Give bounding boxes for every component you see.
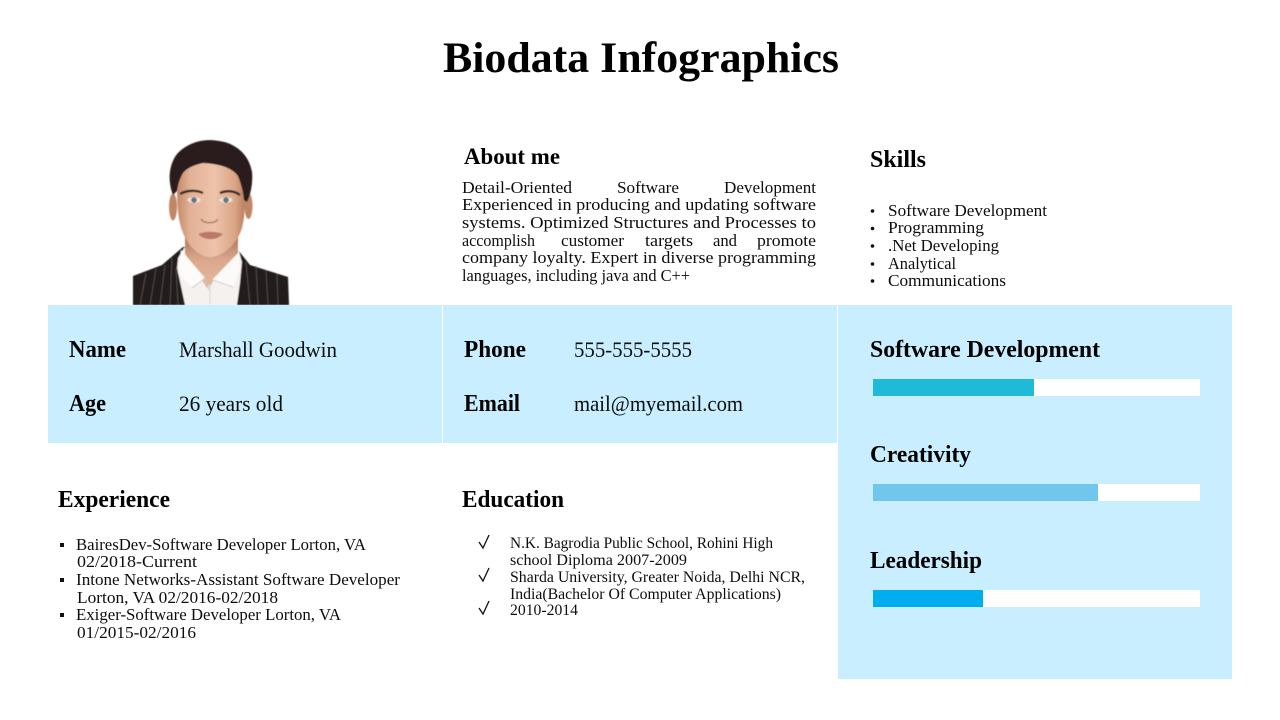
about me paragraph: company loyalty. Expert in diverse programming (462, 248, 816, 267)
about me paragraph: accomplish (462, 231, 536, 250)
about me paragraph (462, 178, 816, 285)
education list: 2010-2014 (510, 602, 578, 619)
heading: education: Education (462, 486, 564, 513)
education list: Sharda University, Greater Noida, Delhi NCR, (510, 569, 805, 586)
about me paragraph: languages, including java and C++ (462, 266, 690, 285)
eyebrows (180, 191, 240, 195)
education list: school Diploma 2007-2009 (510, 552, 687, 569)
education list: India(Bachelor Of Computer Applications) (510, 586, 781, 603)
education list (479, 535, 805, 619)
bar: creativity (870, 441, 1200, 501)
panel: phone and email: mail@myemail.com (574, 391, 743, 416)
about me paragraph: Software (617, 178, 679, 197)
skills list: Communications (888, 271, 1006, 290)
panel: phone and email (443, 305, 837, 443)
bar: leadership (870, 547, 1200, 607)
shirt (177, 248, 242, 305)
experience list: 02/2018-Current (77, 552, 197, 571)
panel: name and age (48, 305, 442, 443)
heading: experience: Experience (58, 486, 170, 513)
skills list: Software Development (888, 201, 1047, 220)
mouth (198, 232, 223, 239)
heading: about me: About me (464, 144, 560, 169)
about me paragraph: Detail-Oriented (462, 178, 573, 197)
experience list: 01/2015-02/2016 (77, 623, 196, 642)
skills list: Analytical (888, 254, 956, 273)
panel: name and age: Age (69, 390, 106, 417)
about me paragraph: Development (724, 178, 816, 197)
collar (178, 250, 205, 288)
panel: name and age: Name (69, 336, 126, 363)
panel: phone and email: Phone (464, 336, 526, 363)
nose (201, 219, 218, 223)
bar: software development: Software Development (870, 336, 1101, 363)
panel: phone and email: Email (464, 390, 520, 417)
portrait photo (133, 140, 289, 305)
about me paragraph: and (713, 231, 738, 250)
skills list: .Net Developing (888, 236, 999, 255)
neck (185, 236, 238, 288)
experience list: Intone Networks-Assistant Software Developer (76, 570, 400, 589)
eyes (188, 197, 200, 203)
about me paragraph: targets (645, 231, 693, 250)
experience list (60, 535, 400, 642)
about me paragraph: promote (757, 231, 816, 250)
experience list: BairesDev-Software Developer Lorton, VA (76, 535, 367, 554)
skills list: Programming (888, 218, 985, 237)
about me paragraph: customer (561, 231, 625, 250)
panel: name and age: Marshall Goodwin (179, 337, 337, 362)
about me paragraph: systems. Optimized Structures and Processes to (462, 213, 816, 232)
bar: creativity: Creativity (870, 441, 972, 468)
experience list: Exiger-Software Developer Lorton, VA (76, 605, 342, 624)
bar: leadership: Leadership (870, 547, 982, 574)
education list: N.K. Bagrodia Public School, Rohini High (510, 535, 773, 552)
panel: skill bars (838, 305, 1232, 679)
hair (170, 140, 252, 202)
heading: skills: Skills (870, 146, 926, 173)
jacket (133, 247, 289, 305)
face (177, 160, 245, 257)
experience list: Lorton, VA 02/2016-02/2018 (77, 588, 278, 607)
skills list (871, 201, 1047, 290)
panel: phone and email: 555-555-5555 (574, 337, 692, 362)
title: Biodata Infographics (443, 35, 839, 82)
bar: software development (870, 336, 1200, 396)
panel: name and age: 26 years old (179, 391, 283, 416)
about me paragraph: Experienced in producing and updating software (462, 195, 816, 214)
ears (169, 194, 177, 220)
